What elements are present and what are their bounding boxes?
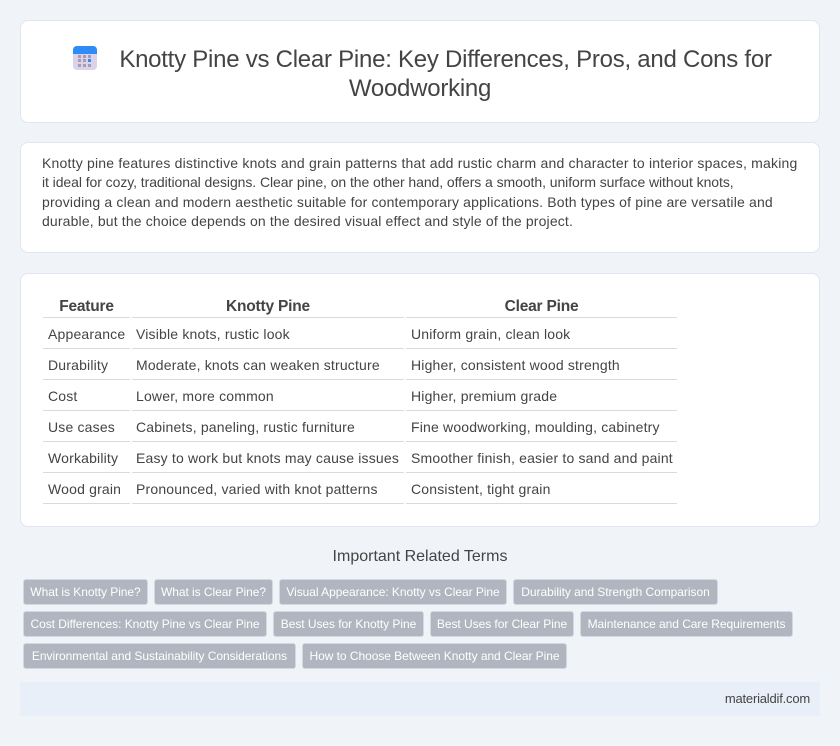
comparison table: Cost xyxy=(48,388,78,404)
comparison table: Easy to work but knots may cause issues xyxy=(136,450,399,466)
related term tags: Best Uses for Clear Pine xyxy=(437,617,567,631)
comparison table: Appearance xyxy=(48,326,125,342)
related term tags xyxy=(23,579,793,669)
title xyxy=(119,46,772,102)
text block: introduction: Knotty pine features distinctive knots and grain patterns that add rustic charm and character to interior spaces, making xyxy=(42,155,798,171)
related term tags: What is Knotty Pine? xyxy=(30,585,141,599)
comparison table: Higher, consistent wood strength xyxy=(411,357,620,373)
comparison table: Lower, more common xyxy=(136,388,274,404)
title: Knotty Pine vs Clear Pine: Key Differences, Pros, and Cons for xyxy=(119,46,772,73)
comparison table: Uniform grain, clean look xyxy=(411,326,570,342)
text block: introduction xyxy=(42,155,798,229)
related term tags: Maintenance and Care Requirements xyxy=(588,617,785,631)
footer bar xyxy=(20,682,820,716)
comparison table: Fine woodworking, moulding, cabinetry xyxy=(411,419,660,435)
comparison table: Higher, premium grade xyxy=(411,388,557,404)
related term tags: Cost Differences: Knotty Pine vs Clear Pine xyxy=(30,617,260,631)
related term tags: Environmental and Sustainability Considerations xyxy=(32,649,287,663)
related term tags: What is Clear Pine? xyxy=(161,585,266,599)
comparison table xyxy=(43,298,677,504)
comparison table: Knotty Pine xyxy=(226,298,310,315)
comparison table: Clear Pine xyxy=(505,298,578,315)
comparison table: Consistent, tight grain xyxy=(411,481,551,497)
comparison table: Pronounced, varied with knot patterns xyxy=(136,481,378,497)
comparison table: Feature xyxy=(59,298,114,315)
comparison table: Cabinets, paneling, rustic furniture xyxy=(136,419,355,435)
panel: comparison table xyxy=(20,273,820,527)
related term tags: Best Uses for Knotty Pine xyxy=(281,617,416,631)
comparison table: Wood grain xyxy=(48,481,121,497)
text block: introduction: providing a clean and modern aesthetic suitable for contemporary applications. Both types of pine are versatile and xyxy=(42,194,773,210)
comparison table: Workability xyxy=(48,450,118,466)
comparison table: Smoother finish, easier to sand and paint xyxy=(411,450,673,466)
footer source text: materialdif.com xyxy=(725,691,810,706)
related term tags: Durability and Strength Comparison xyxy=(521,585,710,599)
comparison table: Durability xyxy=(48,357,108,373)
panel: title card xyxy=(20,20,820,123)
text block: introduction: it ideal for cozy, traditional designs. Clear pine, on the other hand, offers a smooth, uniform surface without knots, xyxy=(42,174,734,190)
comparison table: Use cases xyxy=(48,419,115,435)
icon: calendar xyxy=(73,46,97,70)
heading: important related terms: Important Related Terms xyxy=(333,548,507,565)
text block: introduction: durable, but the choice depends on the desired visual effect and style of the project. xyxy=(42,213,573,229)
related term tags: How to Choose Between Knotty and Clear Pine xyxy=(310,649,560,663)
comparison table: Moderate, knots can weaken structure xyxy=(136,357,380,373)
panel: introduction xyxy=(20,142,820,253)
title: Woodworking xyxy=(349,75,491,102)
comparison table: Visible knots, rustic look xyxy=(136,326,290,342)
related term tags: Visual Appearance: Knotty vs Clear Pine xyxy=(286,585,500,599)
